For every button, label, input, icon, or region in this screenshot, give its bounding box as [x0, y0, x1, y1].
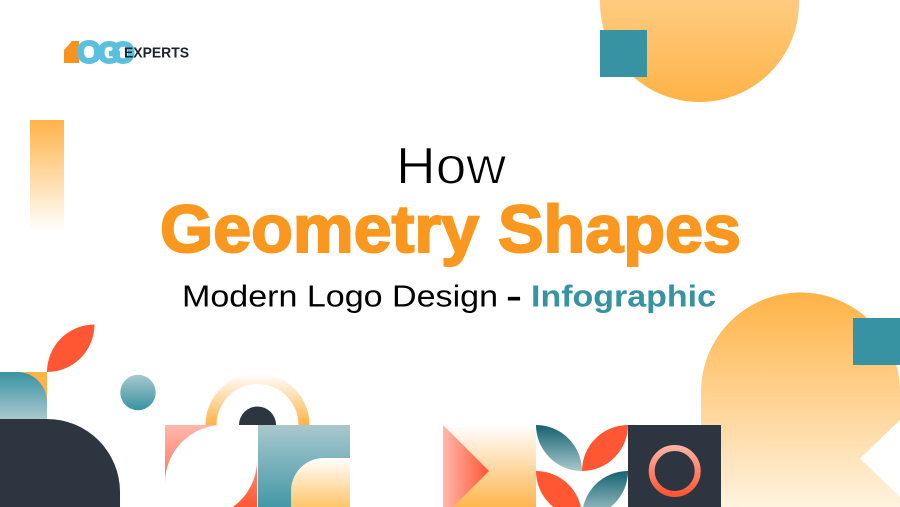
logo word: EXPERTS: EXPERTS [124, 46, 189, 62]
orange tile [443, 425, 536, 507]
right teal square [853, 318, 900, 365]
triangle tile [443, 425, 536, 507]
orange square [0, 372, 47, 419]
bottom-right orange keyhole shape [701, 292, 900, 507]
logo: Logo Experts [64, 34, 189, 70]
teal leaf top-left [536, 425, 582, 471]
subtitle: Modern Logo Design - Infographic [182, 278, 716, 314]
logo word: LOGO: O [112, 38, 135, 70]
logo word: LOGO: G [98, 38, 121, 70]
subtitle: Modern Logo Design - Infographic: Infographic [531, 278, 716, 314]
red leaf top-right [582, 425, 628, 471]
dark quarter dome [0, 419, 120, 507]
teal rounded block [0, 372, 47, 419]
top-right orange circle [600, 0, 799, 102]
red leaf bottom-left [536, 471, 582, 507]
red leaf [47, 324, 94, 372]
coral ring [652, 448, 698, 494]
top teal square [600, 30, 647, 77]
title line: How: How [396, 138, 506, 196]
white leaf on red tile [165, 425, 257, 507]
left orange fading bar [30, 120, 64, 231]
orange rounded patch [291, 458, 350, 507]
teal tile [258, 425, 350, 507]
dark square [628, 425, 721, 507]
title line: Geometry Shapes: Geometry Shapes [160, 192, 741, 267]
logo word: LOGO [64, 34, 135, 70]
dark half circle [239, 406, 276, 425]
red triangle [443, 425, 489, 507]
dark ring tile [628, 425, 721, 507]
orange arch [206, 373, 310, 425]
red tile [165, 425, 257, 507]
teal circle [120, 375, 156, 410]
teal leaf bottom-right [582, 471, 628, 507]
logo word: LOGO: O [77, 34, 101, 70]
subtitle: Modern Logo Design - Infographic: Modern Logo Design [182, 278, 498, 314]
bottom-left cluster [0, 324, 120, 507]
subtitle: Modern Logo Design - Infographic: - [506, 278, 522, 314]
leaves tile [536, 425, 628, 507]
arch and red-teal tiles [165, 373, 350, 507]
title block [160, 138, 741, 314]
